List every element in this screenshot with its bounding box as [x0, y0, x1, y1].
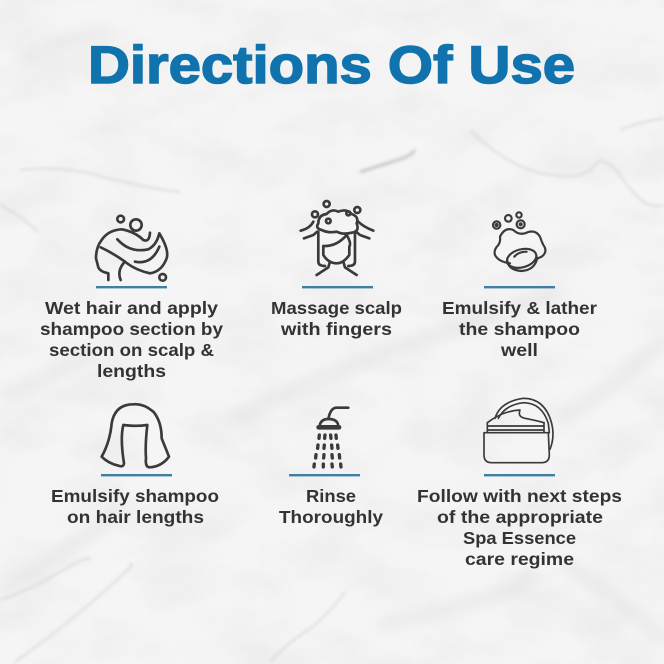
step 5: rinse [279, 408, 383, 527]
icon: hair with water drops [96, 216, 167, 281]
step 3 text: Emulsify & lather [442, 298, 597, 318]
step 6 text: Spa Essence [463, 528, 576, 548]
step 2 text [271, 298, 402, 339]
title: Directions Of Use [88, 36, 575, 95]
step 6 text: Follow with next steps [417, 486, 622, 506]
step 2: massage scalp [271, 201, 402, 339]
step 1 text: section on scalp & [49, 340, 214, 360]
step 3 text: well [500, 340, 538, 360]
step 6 text: of the appropriate [437, 507, 603, 527]
step 1: wet hair [40, 216, 223, 381]
step 3: lather [442, 212, 597, 360]
step 1 text: lengths [97, 361, 166, 381]
step 6: next steps [417, 398, 622, 569]
step 3 text: the shampoo [459, 319, 580, 339]
step 5 text: Thoroughly [279, 507, 383, 527]
icon: long hair outline [102, 404, 169, 467]
step 2 text: Massage scalp [271, 298, 402, 318]
step 4 text: on hair lengths [67, 507, 204, 527]
step 4 text [51, 486, 219, 527]
step 2 text: with fingers [280, 319, 392, 339]
icon: open cream jar [484, 398, 553, 463]
step 1 text: Wet hair and apply [45, 298, 218, 318]
step 4 text: Emulsify shampoo [51, 486, 219, 506]
step 6 text: care regime [465, 549, 574, 569]
step 5 text [279, 486, 383, 527]
step 1 text [40, 298, 223, 381]
icon: head with foam [301, 201, 373, 275]
icon: shower head [314, 408, 348, 467]
step 4: hair lengths [51, 404, 219, 527]
step 3 text [442, 298, 597, 360]
step 6 text [417, 486, 622, 569]
step 5 text: Rinse [306, 486, 356, 506]
step 1 text: shampoo section by [40, 319, 223, 339]
icon: soap with bubbles [493, 212, 545, 271]
